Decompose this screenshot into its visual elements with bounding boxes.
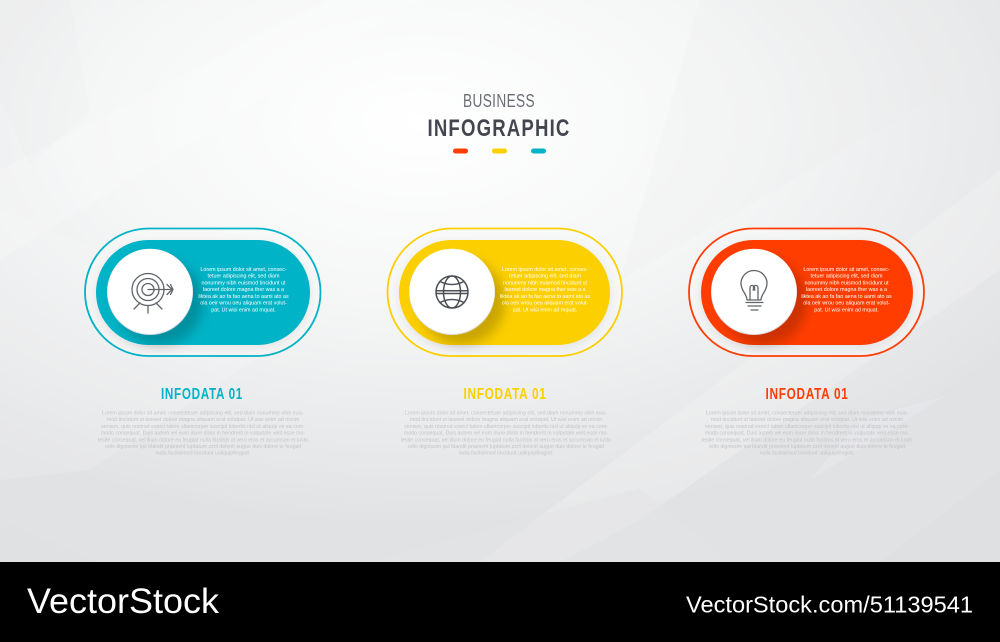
card text: liktea ak ao fa fao aena to aami ato as [500, 294, 590, 300]
body copy: veniam, quis nostrud exerci tation ullamcorper suscipit lobortis nisl ut aliquip ex ea com- [705, 424, 909, 430]
panel: teal card [85, 228, 320, 356]
footer bar [0, 562, 1000, 642]
circle [711, 249, 797, 335]
card text: Lorem ipsum dolor sit amet, consec- [200, 267, 287, 273]
colour dashes [453, 148, 546, 154]
icon: target [132, 274, 173, 313]
text block: teal column [98, 386, 308, 457]
text block: yellow column [401, 386, 611, 457]
body copy: modo consequat. Duis autem vel eum iriure dolor in hendrerit in vulputate velit esse mo- [404, 431, 608, 437]
body copy: Lorem ipsum dolor sit amet, consectetuer adipiscing elit, sed diam nonummy nibh euis- [405, 410, 607, 416]
card text: Lorem ipsum dolor sit amet, consec- [803, 267, 890, 273]
body copy: nulla facilisimod tincidunt ualiquipfeugiat. [459, 451, 553, 457]
body copy: nulla facilisimod tincidunt ualiquipfeugiat. [156, 451, 250, 457]
body copy [98, 410, 308, 457]
body copy: mod tincidunt ut laoreet dolore magna aliquam erat volutpat. Ut wisi enim ad minim [711, 417, 904, 423]
body copy: odio dignissim qui blandit praesent luptatum zzril delenit augue duis dolore te feugait [709, 444, 906, 450]
card text: pat. Ut wisi enim ad mquat. [513, 307, 577, 313]
inner pill [96, 240, 310, 345]
body copy: lestie consequat, vel illum dolore eu feugiat nulla facilisis at vero eros et accumsan et iusto [702, 437, 912, 443]
panel: yellow card [388, 228, 622, 356]
body copy: veniam, quis nostrud exerci tation ullamcorper suscipit lobortis nisl ut aliquip ex ea com- [101, 424, 305, 430]
inner pill [399, 240, 610, 345]
body copy: odio dignissim qui blandit praesent luptatum zzril delenit augue duis dolore te feugait [408, 444, 605, 450]
body copy: veniam, quis nostrud exerci tation ullamcorper suscipit lobortis nisl ut aliquip ex ea com- [404, 424, 608, 430]
icon: light bulb [741, 270, 767, 310]
card text: pat. Ut wisi enim ad mquat. [211, 307, 276, 313]
heading: INFODATA 01 [464, 386, 546, 403]
card text: ola oeir wrou oeu aliquam erat volut- [502, 301, 588, 307]
panel: red card [689, 228, 924, 356]
heading: INFODATA 01 [161, 386, 243, 403]
title [428, 90, 570, 154]
circle [107, 249, 193, 335]
icon: globe [436, 276, 468, 308]
outer outline [388, 228, 622, 356]
card text: laoreet dolore magna ther was a a [203, 287, 284, 293]
inner pill [701, 240, 913, 345]
card text: nonummy nibh euismod tincidunt ut [804, 280, 889, 286]
card text: tetuer adipiscing elit, sed diam [208, 274, 280, 280]
title line: business: BUSINESS [463, 90, 535, 111]
card text: liktea ak ao fa fao aena to aami ato as [198, 294, 289, 300]
title line: infographic: INFOGRAPHIC [428, 116, 570, 142]
card text: nonummy nibh euismod tincidunt ut [201, 280, 286, 286]
card text: liktea ak ao fa fao aena to aami ato as [801, 294, 892, 300]
body copy: Lorem ipsum dolor sit amet, consectetuer adipiscing elit, sed diam nonummy nibh euis- [706, 410, 908, 416]
footer url: VectorStock.com/51139541 [686, 592, 973, 618]
body copy: nulla facilisimod tincidunt ualiquipfeugiat. [760, 451, 854, 457]
card text: laoreet dolore magna ther was a a [504, 287, 586, 293]
text block: red column [702, 386, 912, 457]
body copy: odio dignissim qui blandit praesent luptatum zzril delenit augue duis dolore te feugait [105, 444, 302, 450]
body copy: mod tincidunt ut laoreet dolore magna aliquam erat volutpat. Ut wisi enim ad minim [410, 417, 603, 423]
card text: nonummy nibh euismod tincidunt ut [503, 280, 588, 286]
body copy: mod tincidunt ut laoreet dolore magna aliquam erat volutpat. Ut wisi enim ad minim [107, 417, 300, 423]
card text: Lorem ipsum dolor sit amet, consec- [502, 267, 588, 273]
card text: pat. Ut wisi enim ad mquat. [814, 307, 879, 313]
heading: INFODATA 01 [766, 386, 848, 403]
body copy [401, 410, 611, 457]
body copy: Lorem ipsum dolor sit amet, consectetuer adipiscing elit, sed diam nonummy nibh euis- [102, 410, 304, 416]
outer outline [689, 228, 924, 356]
card text: ola oeir wrou oeu aliquam erat volut- [803, 301, 890, 307]
card text: tetuer adipiscing elit, sed diam [509, 274, 581, 280]
card text [801, 267, 892, 313]
card text: laoreet dolore magna ther was a a [806, 287, 887, 293]
outer outline [85, 228, 320, 356]
card text: ola oeir wrou oeu aliquam erat volut- [200, 301, 287, 307]
card text: tetuer adipiscing elit, sed diam [811, 274, 883, 280]
body copy: lestie consequat, vel illum dolore eu feugiat nulla facilisis at vero eros et accumsan et iusto [98, 437, 308, 443]
card text [198, 267, 289, 313]
circle [409, 249, 495, 335]
body copy: modo consequat. Duis autem vel eum iriure dolor in hendrerit in vulputate velit esse mo- [705, 431, 909, 437]
footer logo: VectorStock [27, 582, 220, 621]
card text [500, 267, 590, 313]
body copy [702, 410, 912, 457]
body copy: modo consequat. Duis autem vel eum iriure dolor in hendrerit in vulputate velit esse mo- [101, 431, 305, 437]
body copy: lestie consequat, vel illum dolore eu feugiat nulla facilisis at vero eros et accumsan et iusto [401, 437, 611, 443]
